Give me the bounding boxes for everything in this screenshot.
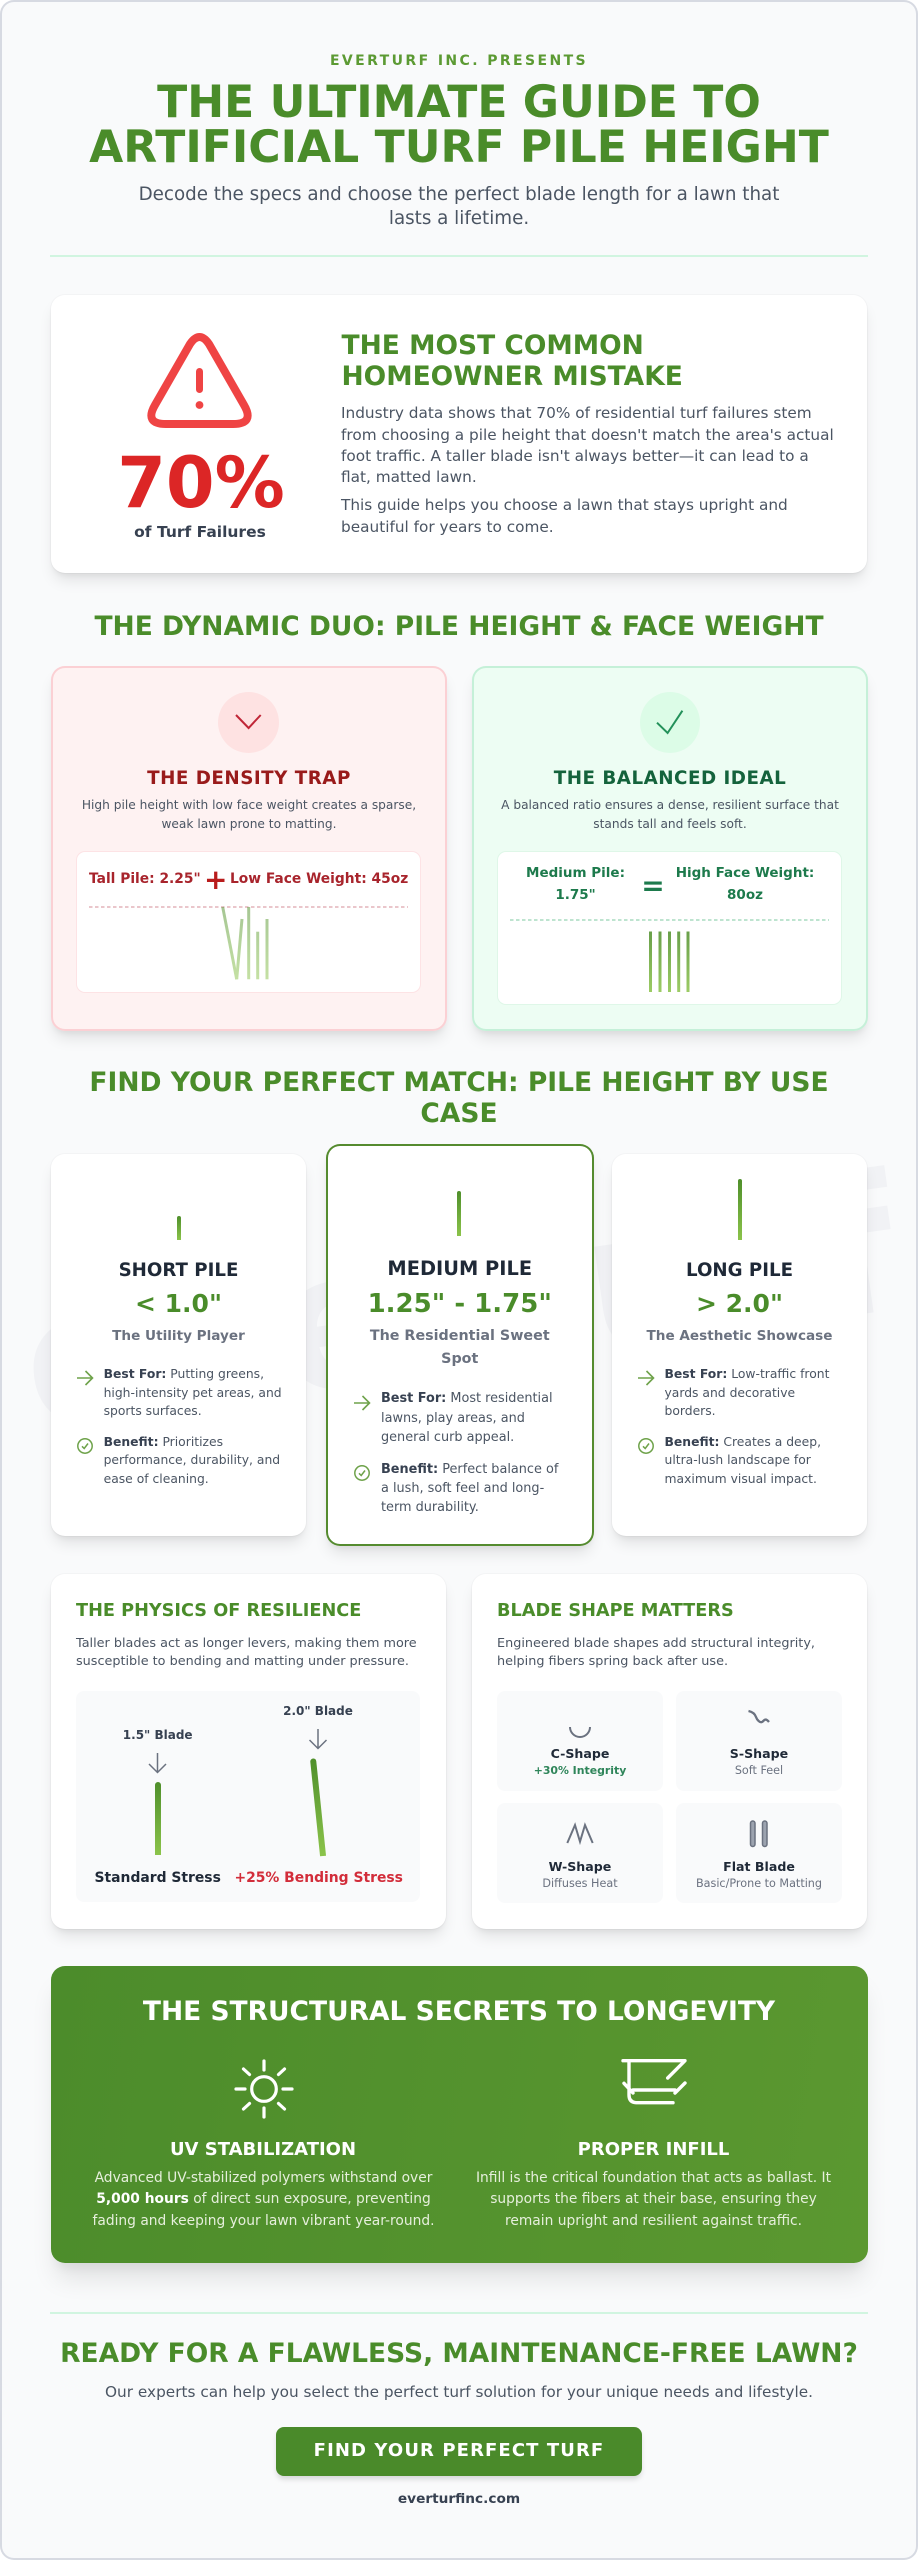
label: standard stress: Standard Stress (95, 1870, 221, 1886)
benefit: term durability. (381, 1500, 479, 1515)
card title: THE BALANCED IDEAL (554, 768, 786, 788)
icon: medium blade (457, 1191, 461, 1236)
icon: sun (234, 2059, 294, 2119)
body text: from choosing a pile height that doesn't match the area's actual (341, 426, 834, 444)
icon: long blade (738, 1179, 742, 1240)
description (76, 1636, 417, 1669)
heading: dynamic duo: THE DYNAMIC DUO: PILE HEIGHT & FACE WEIGHT (94, 610, 824, 642)
title: ARTIFICIAL TURF PILE HEIGHT (89, 122, 829, 173)
body text: foot traffic. A taller blade isn't always better—it can lead to a (341, 447, 809, 465)
label: high face weight (676, 865, 814, 902)
range: 1.25" - 1.75" (368, 1288, 552, 1318)
description (497, 1636, 815, 1669)
panel: density trap (51, 666, 447, 1031)
label: C-Shape (551, 1746, 609, 1761)
body text 2 (340, 496, 788, 536)
best for: borders. (664, 1404, 716, 1418)
diagram: blade stress (76, 1691, 420, 1902)
heading: perfect match: FIND YOUR PERFECT MATCH: PILE HEIGHT BY USE (89, 1067, 829, 1098)
benefit: Benefit: Perfect balance of (381, 1462, 558, 1477)
best for: lawns, play areas, and (381, 1411, 525, 1426)
icon: check (354, 1465, 370, 1481)
description (501, 798, 839, 830)
note: Basic/Prone to Matting (696, 1877, 822, 1890)
panel: balanced ideal (472, 666, 868, 1031)
big stat: 70% (117, 442, 285, 524)
cell: w-shape (497, 1803, 663, 1903)
subtitle: Decode the specs and choose the perfect blade length for a lawn that (139, 184, 779, 204)
diagram: dense blades (498, 852, 841, 1004)
body text 2: beautiful for years to come. (341, 518, 554, 536)
name: MEDIUM PILE (387, 1256, 532, 1280)
label: S-Shape (730, 1746, 788, 1761)
description: weak lawn prone to matting. (161, 816, 337, 830)
label: tall pile: Tall Pile: 2.25" (89, 871, 201, 887)
benefit (664, 1434, 821, 1486)
text: infill: remain upright and resilient against traffic. (505, 2213, 802, 2229)
best for (664, 1367, 830, 1418)
panel: physics of resilience (51, 1574, 446, 1929)
panel: short pile (51, 1154, 306, 1536)
best for: Best For: Putting greens, (104, 1367, 264, 1381)
text: infill (476, 2170, 831, 2229)
benefit: ultra-lush landscape for (664, 1453, 811, 1467)
tagline (370, 1328, 550, 1366)
text: infill: Infill is the critical foundation that acts as ballast. It (476, 2170, 831, 2186)
arrow and 1.5 blade (148, 1753, 166, 1855)
benefit: performance, durability, and (104, 1453, 280, 1467)
text: infill: supports the fibers at their base, ensuring they (490, 2191, 817, 2207)
label: medium pile: 1.75" (555, 886, 596, 902)
panel: most common mistake (51, 295, 867, 573)
label: 2.0 blade: 2.0" Blade (283, 1704, 353, 1718)
best for: sports surfaces. (104, 1404, 202, 1418)
description: Taller blades act as longer levers, making them more (76, 1636, 417, 1650)
cell: s-shape (676, 1691, 842, 1790)
body text: Industry data shows that 70% of residential turf failures stem (341, 404, 812, 422)
heading: READY FOR A FLAWLESS, MAINTENANCE-FREE LAWN? (60, 2338, 858, 2369)
icon: check (77, 1438, 93, 1454)
description: stands tall and feels soft. (593, 816, 747, 830)
heading: THE PHYSICS OF RESILIENCE (76, 1600, 361, 1620)
label: W-Shape (549, 1859, 611, 1874)
icon: down chevron (218, 692, 279, 753)
equals: = (641, 869, 665, 902)
icon: arrow (638, 1370, 654, 1386)
name: SHORT PILE (119, 1260, 238, 1281)
range: < 1.0" (135, 1289, 222, 1318)
dense blades (510, 919, 829, 992)
heading: BLADE SHAPE MATTERS (497, 1600, 734, 1620)
plus: + (204, 863, 227, 896)
label: high face weight: High Face Weight: (676, 865, 814, 881)
label: 1.5 blade: 1.5" Blade (123, 1728, 193, 1742)
best for: general curb appeal. (381, 1430, 514, 1445)
text: uv (92, 2170, 434, 2229)
icon: check (640, 692, 700, 753)
eyebrow: EVERTURF INC. PRESENTS (330, 53, 588, 69)
icon: w (566, 1822, 594, 1845)
description (82, 798, 416, 830)
description: Engineered blade shapes add structural integrity, (497, 1636, 815, 1650)
label: low face weight: Low Face Weight: 45oz (230, 871, 408, 887)
body text 2: This guide helps you choose a lawn that stays upright and (341, 496, 788, 514)
benefit (104, 1434, 280, 1486)
icon: flat (750, 1820, 768, 1848)
button (276, 2427, 642, 2476)
description: A balanced ratio ensures a dense, resilient surface that (501, 798, 839, 812)
heading: THE STRUCTURAL SECRETS TO LONGEVITY (143, 1996, 775, 2027)
subtitle: lasts a lifetime. (389, 208, 529, 229)
note: Soft Feel (735, 1764, 783, 1777)
panel: structural secrets (50, 1966, 868, 2263)
text: uv: fading and keeping your lawn vibrant year-round. (93, 2213, 434, 2229)
text: Our experts can help you select the perfect turf solution for your unique needs and lifestyle. (105, 2383, 813, 2401)
description: High pile height with low face weight creates a sparse, (82, 798, 416, 812)
best for: Best For: Most residential (381, 1391, 553, 1406)
label: high face weight: 80oz (727, 886, 763, 902)
arrow and 2.0 blade (309, 1729, 327, 1856)
label: Flat Blade (723, 1859, 795, 1874)
note: +30% Integrity (534, 1764, 626, 1777)
icon: s (748, 1710, 770, 1724)
best for: high-intensity pet areas, and (104, 1386, 282, 1400)
title (89, 76, 829, 173)
best for: Best For: Low-traffic front (664, 1367, 829, 1381)
icon: infill (621, 2059, 687, 2104)
heading: HOMEOWNER MISTAKE (342, 361, 683, 392)
best for (381, 1391, 553, 1445)
icon: short blade (176, 1216, 180, 1240)
best for (104, 1367, 282, 1418)
best for: yards and decorative (664, 1386, 795, 1400)
panel: blade shape (472, 1574, 867, 1929)
title: THE ULTIMATE GUIDE TO (157, 76, 761, 128)
subtitle (139, 184, 779, 229)
body text (341, 404, 834, 486)
watermark: everturf (9, 1134, 909, 1475)
icon: check (638, 1438, 654, 1454)
diagram: sparse blades (77, 852, 420, 992)
text: uv: 5,000 hours of direct sun exposure, preventing (96, 2191, 431, 2207)
tagline: Spot (441, 1350, 478, 1366)
label: bending stress: +25% Bending Stress (234, 1870, 403, 1886)
heading: perfect match (89, 1067, 829, 1129)
benefit: Benefit: Creates a deep, (664, 1434, 821, 1448)
heading: perfect match: CASE (420, 1098, 498, 1129)
tagline: The Aesthetic Showcase (646, 1328, 832, 1344)
heading (342, 330, 683, 392)
description: helping fibers spring back after use. (497, 1654, 728, 1669)
heading: uv: UV STABILIZATION (170, 2139, 356, 2160)
benefit (381, 1462, 559, 1515)
header (89, 53, 829, 229)
icon: warning triangle (147, 333, 252, 428)
button: FIND YOUR PERFECT TURF (314, 2440, 604, 2461)
tagline: The Residential Sweet (370, 1328, 550, 1344)
body text: flat, matted lawn. (341, 468, 477, 486)
label: medium pile (526, 865, 625, 902)
tagline: The Utility Player (112, 1328, 245, 1344)
icon: arrow (354, 1395, 370, 1411)
cell: c-shape (497, 1691, 663, 1790)
name: LONG PILE (686, 1260, 793, 1281)
heading: infill: PROPER INFILL (578, 2139, 729, 2160)
description: susceptible to bending and matting under pressure. (76, 1654, 409, 1669)
cell: flat blade (676, 1803, 842, 1903)
icon: arrow (77, 1370, 94, 1386)
benefit: Benefit: Prioritizes (104, 1434, 223, 1448)
text: uv: Advanced UV-stabilized polymers withstand over (95, 2170, 432, 2186)
label: medium pile: Medium Pile: (526, 865, 625, 881)
icon: c (569, 1727, 591, 1738)
sparse blades (89, 906, 408, 980)
benefit: maximum visual impact. (664, 1472, 817, 1486)
note: Diffuses Heat (542, 1877, 618, 1890)
panel: medium pile (326, 1144, 594, 1546)
heading: THE MOST COMMON (342, 330, 644, 361)
stat caption: of Turf Failures (134, 523, 266, 541)
panel: long pile (612, 1154, 867, 1536)
benefit: a lush, soft feel and long- (381, 1481, 544, 1496)
card title: THE DENSITY TRAP (147, 768, 351, 788)
range: > 2.0" (696, 1289, 783, 1318)
benefit: ease of cleaning. (104, 1472, 209, 1486)
call to action (60, 2338, 858, 2507)
url: everturfinc.com (398, 2491, 520, 2507)
